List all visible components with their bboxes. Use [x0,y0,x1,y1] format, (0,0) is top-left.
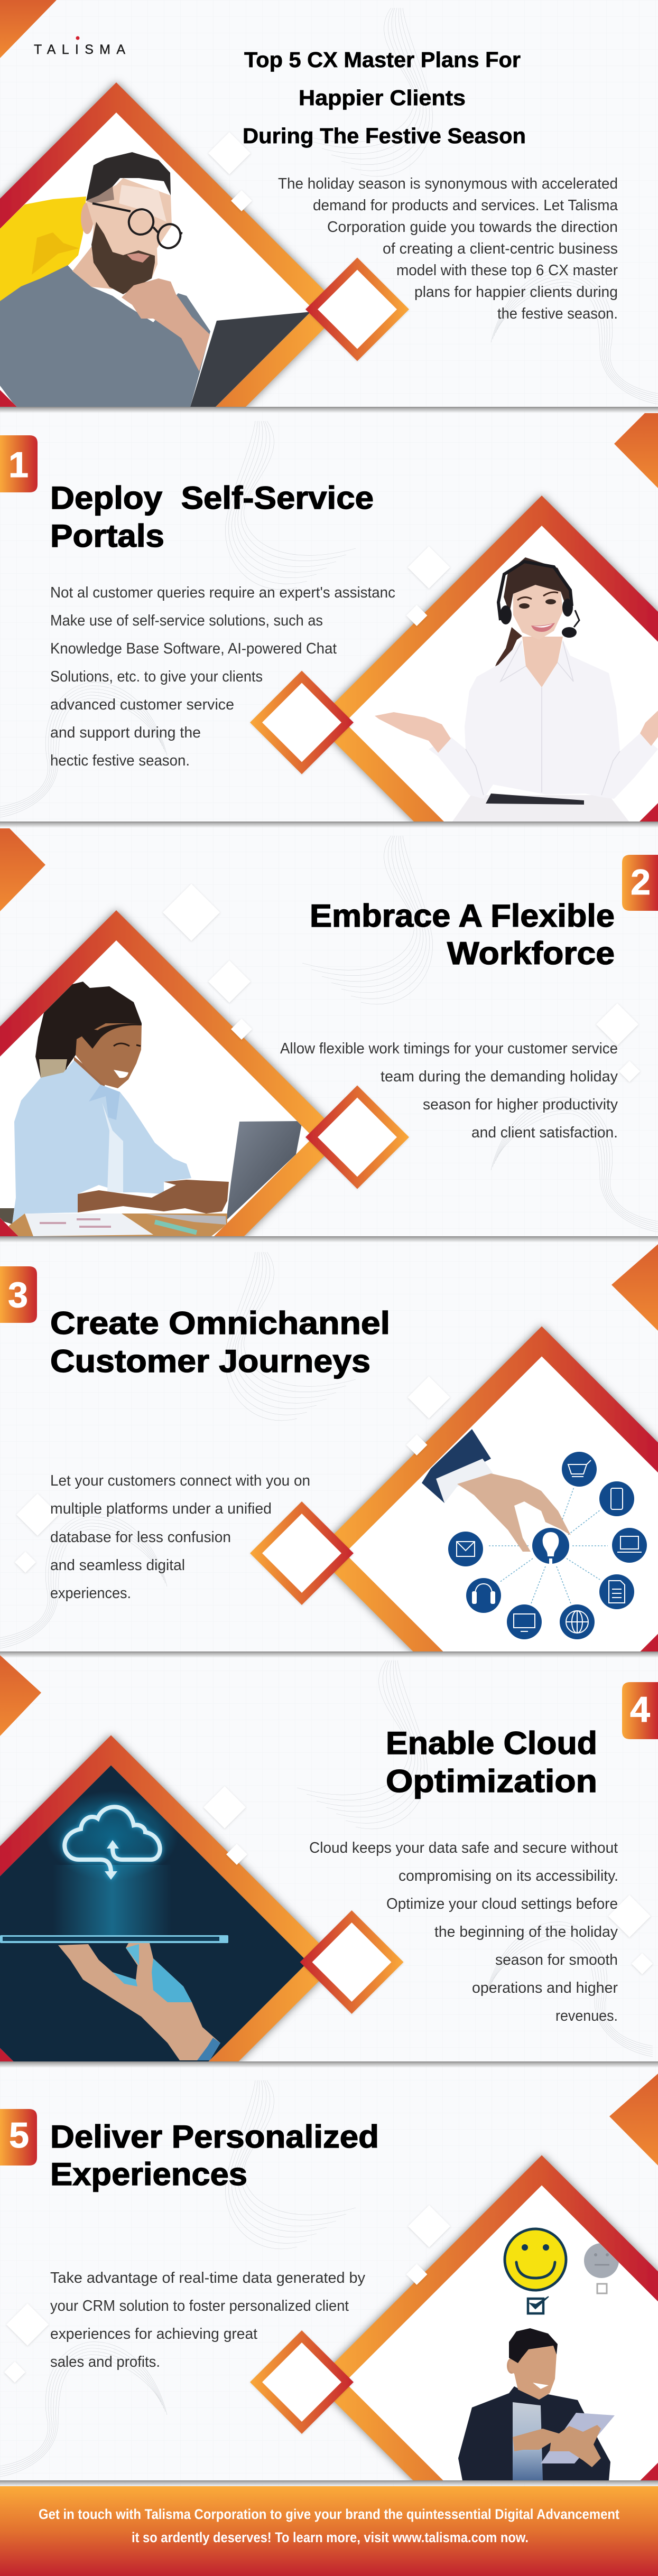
heading: Portals [50,518,164,554]
panel: step 2 flexible workforce [0,828,658,1242]
photo: man with tablet and smiley feedback [458,2229,619,2480]
intro body text: demand for products and services. Let Talisma [313,197,618,214]
rhombus frame with photo [330,492,658,822]
small gradient diamond [250,671,354,774]
body text: hectic festive season. [50,752,190,769]
heading: Deliver Personalized [50,2119,379,2154]
intro rhombus frame with photo [0,79,329,407]
small gradient diamond [250,1501,354,1605]
body text: experiences for achieving great [50,2326,257,2342]
title: Happier Clients [299,86,466,110]
intro body text: plans for happier clients during [414,284,618,301]
small gradient diamond [250,2330,354,2434]
number badge 3 [0,1266,37,1323]
heading: Experiences [50,2157,247,2192]
panel: step 4 cloud optimization [0,1655,658,2189]
body text: compromising on its accessibility. [398,1868,618,1884]
body text: experiences. [50,1585,131,1602]
intro body text: The holiday season is synonymous with accelerated [278,175,618,192]
body text: advanced customer service [50,696,234,713]
small gradient diamond [300,1910,404,2014]
body text: and support during the [50,724,201,741]
body text [50,1472,310,1602]
corner triangle [0,828,45,911]
decorative white diamonds [15,1376,450,1573]
intro body text: the festive season. [497,305,618,322]
heading: Create Omnichannel [50,1305,390,1341]
decorative white diamonds [163,884,640,1082]
body text: and seamless digital [50,1557,185,1574]
number badge 4 [622,1682,658,1739]
body text: Optimize your cloud settings before [386,1896,618,1912]
panel: intro [0,0,658,413]
body text: Make use of self-service solutions, such as [50,612,323,629]
intro body text: Corporation guide you towards the direction [327,219,618,236]
corner triangle [611,1244,658,1331]
title [243,48,526,148]
heading: Enable Cloud [386,1725,597,1761]
panel: step 1 self-service portals [0,413,658,827]
body text: Take advantage of real-time data generated by [50,2270,365,2286]
number badge 2 [622,855,658,911]
rhombus frame with photo [0,907,329,1236]
body text [50,584,395,769]
body text: Knowledge Base Software, AI-powered Chat [50,640,337,657]
decorative white diamonds [406,546,450,626]
footer call to action [0,2486,658,2576]
body text: the beginning of the holiday [434,1924,618,1940]
heading [386,1725,597,1799]
number badge 5: 5 [9,2115,29,2155]
body text: Allow flexible work timings for your customer service [280,1040,618,1057]
heading: Workforce [447,936,615,971]
intro body text [278,175,618,322]
decorative white diamonds [208,132,252,211]
heading: Optimization [386,1763,597,1799]
number badge 1: 1 [8,445,29,485]
number badge 3: 3 [8,1275,28,1315]
body text: Cloud keeps your data safe and secure without [309,1840,618,1856]
number badge 4: 4 [630,1690,650,1730]
intro body text: of creating a client-centric business [383,240,618,257]
panel: step 3 omnichannel journeys [0,1244,658,1780]
rhombus frame with illustration [330,1323,658,1651]
body text: and client satisfaction. [471,1124,618,1141]
photo: man with laptop [0,152,312,407]
decorative white diamonds [203,1786,653,1974]
photo: woman typing at laptop [0,982,302,1236]
body text: sales and profits. [50,2354,160,2370]
body text [280,1040,618,1141]
rhombus frame with illustration [0,1735,338,2189]
body text: database for less confusion [50,1529,231,1546]
heading [310,898,615,971]
heading [50,1305,390,1379]
footer call to action: it so ardently deserves! To learn more, visit www.talisma.com now. [132,2530,529,2545]
logo: Talisma: TALISMA [34,42,125,57]
heading: Deploy Self-Service [50,480,374,516]
corner triangle [0,0,57,58]
rhombus frame with photo [315,2155,658,2576]
body text: team during the demanding holiday [381,1068,618,1085]
body text: Let your customers connect with you on [50,1472,310,1489]
panel: step 5 personalized experiences [0,2074,658,2576]
illustration: cloud above tablet on hand [0,1791,228,2060]
number badge 1 [0,435,38,492]
small gradient diamond [305,258,409,361]
body text: operations and higher [472,1980,618,1996]
body text: season for smooth [495,1952,618,1968]
body text: Not al customer queries require an expert's assistanc [50,584,395,601]
body text: Solutions, etc. to give your clients [50,668,263,685]
title: During The Festive Season [243,124,526,148]
body text: multiple platforms under a unified [50,1500,272,1517]
body text: season for higher productivity [423,1096,618,1113]
illustration: hand and channel icons [422,1429,647,1639]
intro body text: model with these top 6 CX master [396,262,618,279]
body text: revenues. [555,2008,618,2024]
corner triangle [614,413,658,488]
title: Top 5 CX Master Plans For [244,48,521,72]
number badge 5 [0,2109,37,2166]
corner triangle [0,1655,41,1736]
photo: woman with headset [375,557,658,822]
heading [50,480,374,554]
heading: Embrace A Flexible [310,898,615,934]
number badge 2: 2 [631,862,651,902]
body text [50,2270,365,2370]
heading: Customer Journeys [50,1343,370,1379]
small gradient diamond [305,1085,409,1189]
heading [50,2119,379,2192]
body text: your CRM solution to foster personalized client [50,2298,349,2314]
corner triangle [609,2074,658,2166]
body text [309,1840,618,2024]
decorative white diamonds [4,2205,450,2383]
